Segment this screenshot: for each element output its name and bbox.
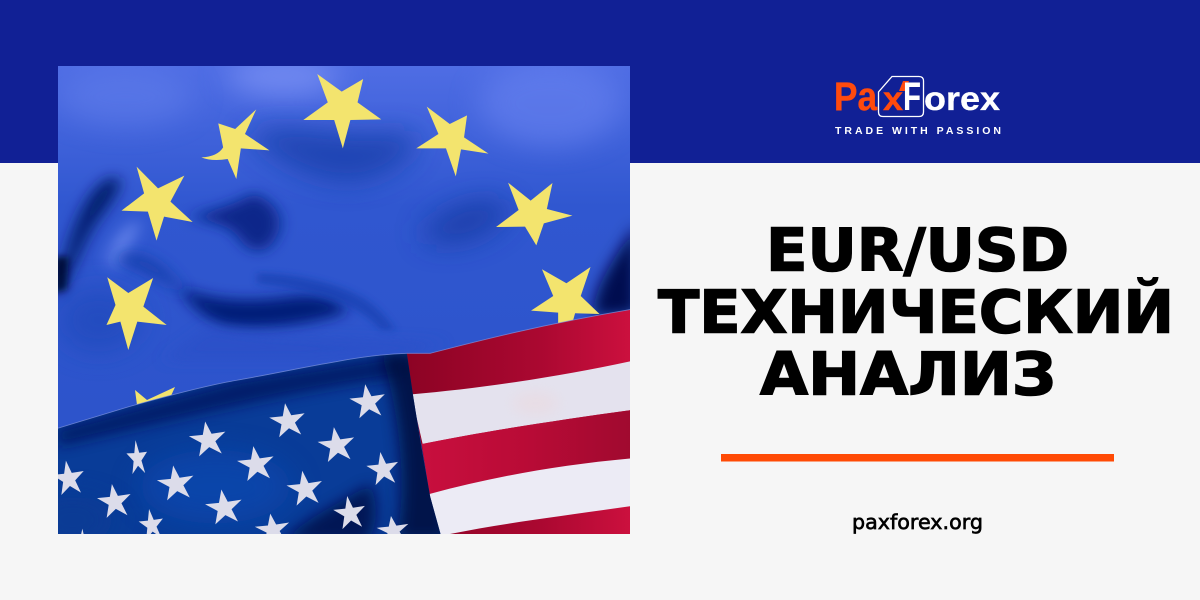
logo icon: rounded box with cut corner	[878, 76, 924, 116]
orange divider	[721, 454, 1114, 462]
logo tagline: TRADE WITH PASSION	[835, 125, 1001, 137]
photo: EU and US flags	[31, 57, 637, 545]
logo accent slash	[899, 81, 909, 91]
star: right	[496, 183, 572, 245]
EU yellow stars	[106, 74, 600, 350]
red and white stripes	[406, 309, 632, 540]
star: lower left	[106, 277, 167, 350]
blue star canton	[58, 354, 440, 534]
website url: paxforex.org	[852, 510, 983, 534]
title line 1: EUR/USD	[766, 216, 1069, 284]
logo: PaxForex	[834, 75, 1001, 137]
title	[658, 216, 1174, 408]
logo wordmark: F: F	[903, 75, 921, 119]
small star cut by the flag seam	[135, 387, 175, 404]
star: upper right	[416, 107, 489, 176]
star: top	[303, 74, 381, 148]
logo wordmark: x: x	[883, 80, 904, 117]
star: upper left	[201, 109, 269, 179]
canton stars	[50, 382, 411, 545]
title line 3: АНАЛИЗ	[760, 340, 1056, 408]
title line 2: ТЕХНИЧЕСКИЙ	[658, 278, 1174, 346]
logo wordmark: orex: orex	[924, 80, 1001, 117]
US flag	[31, 309, 632, 545]
star: left	[122, 167, 193, 241]
logo wordmark: Pa: Pa	[834, 75, 878, 119]
star: lower right	[531, 267, 600, 327]
header band	[0, 0, 1200, 163]
flag seam highlight	[58, 309, 632, 428]
EU flag fabric	[58, 66, 630, 498]
